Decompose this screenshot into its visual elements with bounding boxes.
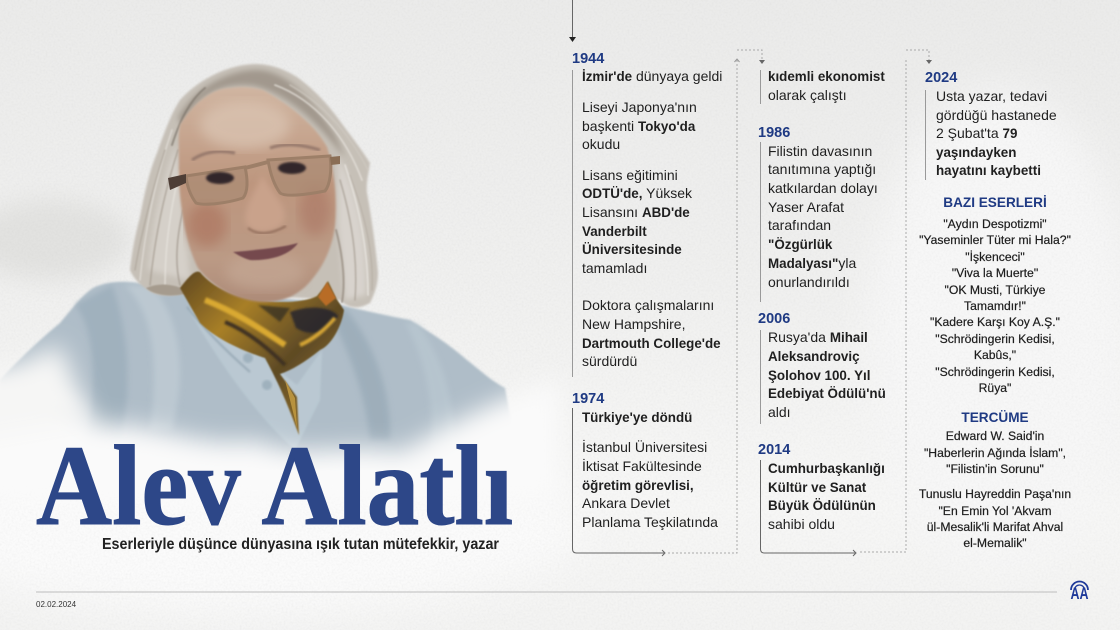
list: translations: "En Emin Yol 'Akvam	[938, 504, 1052, 518]
entry 2024	[936, 88, 1057, 178]
entry 1944: sürdürdü	[582, 353, 637, 369]
entry 1974: İstanbul Üniversitesi	[582, 438, 707, 455]
entry continued: kıdemli ekonomist	[768, 69, 885, 84]
title: Alev Alatlı	[36, 422, 513, 549]
heading: translations: TERCÜME	[961, 410, 1029, 425]
entry 2024: 2 Şubat'ta 79	[936, 125, 1017, 141]
entry 2024: hayatını kaybetti	[936, 163, 1041, 178]
list: works	[919, 217, 1071, 395]
entry 2006: Rusya'da Mihail	[768, 329, 868, 345]
entry 2014: Kültür ve Sanat	[768, 480, 867, 495]
entry 1974	[582, 410, 718, 530]
timeline connector: column 3	[924, 90, 926, 180]
list: translations: Tunuslu Hayreddin Paşa'nın	[919, 487, 1071, 501]
date: 02.02.2024	[36, 600, 77, 609]
list: works: "İşkenceci"	[965, 250, 1025, 264]
year 2024: 2024	[925, 70, 957, 86]
year 1986: 1986	[758, 125, 790, 141]
entry 2006: Aleksandroviç	[768, 349, 860, 364]
list: works: "Kadere Karşı Koy A.Ş."	[930, 315, 1060, 329]
list: works: Rüya"	[979, 381, 1011, 395]
list: translations	[919, 429, 1071, 550]
entry continued	[768, 69, 885, 103]
entry 1944: başkenti Tokyo'da	[582, 118, 696, 134]
entry 1974: Ankara Devlet	[582, 495, 670, 511]
list: works: "Yaseminler Tüter mi Hala?"	[919, 233, 1071, 247]
timeline connector: column 2	[760, 50, 932, 556]
entry 1986: Madalyası"yla	[768, 255, 856, 271]
glasses	[168, 156, 340, 204]
entry 1986	[768, 143, 878, 290]
hair back	[130, 64, 378, 307]
entry 2006: aldı	[768, 404, 791, 420]
heading: works: BAZI ESERLERİ	[943, 195, 1047, 210]
entry 1986: tanıtımına yaptığı	[768, 161, 876, 177]
entry 1974: Türkiye'ye döndü	[582, 410, 692, 425]
timeline column 3	[925, 70, 1057, 178]
timeline connector: column 1	[569, 0, 765, 556]
entry 1986: onurlandırıldı	[768, 274, 850, 290]
icon: AA logo	[1070, 582, 1089, 603]
entry 1944: New Hampshire,	[582, 316, 685, 332]
entry 2006: Edebiyat Ödülü'nü	[768, 386, 886, 401]
mouth	[233, 243, 298, 260]
list: works: "OK Musti, Türkiye	[945, 283, 1046, 297]
nose	[245, 175, 285, 232]
entry 2024: yaşındayken	[936, 145, 1016, 160]
entry 1974: öğretim görevlisi,	[582, 478, 694, 493]
entry 1944: Doktora çalışmalarını	[582, 297, 714, 313]
list: translations: Edward W. Said'in	[946, 429, 1044, 443]
entry 1986: tarafından	[768, 217, 831, 233]
list: translations: "Haberlerin Ağında İslam",	[924, 446, 1066, 460]
shirt fade to paper	[0, 360, 560, 500]
list: works: "Viva la Muerte"	[952, 266, 1038, 280]
entry 1944: ODTÜ'de, Yüksek	[582, 185, 693, 201]
year 1944: 1944	[572, 51, 604, 67]
entry 2014	[768, 461, 885, 532]
footer rule	[36, 592, 1057, 593]
entry 1944: Üniversitesinde	[582, 242, 682, 257]
entry 1944: Liseyi Japonya'nın	[582, 99, 697, 115]
entry 1944: İzmir'de dünyaya geldi	[582, 68, 722, 84]
hair strands	[135, 85, 372, 302]
entry 2006: Şolohov 100. Yıl	[768, 368, 870, 383]
list: translations: "Filistin'in Sorunu"	[946, 462, 1044, 476]
portrait illustration	[0, 64, 560, 500]
timeline column 2	[758, 69, 886, 532]
entry 2006	[768, 329, 886, 420]
eyebrows	[192, 151, 235, 160]
entry 1986: katkılardan dolayı	[768, 180, 878, 196]
icon: AA logo: AA	[1070, 585, 1089, 603]
entry 1986: Filistin davasının	[768, 143, 872, 159]
entry 2024: gördüğü hastanede	[936, 107, 1057, 123]
entry 1944: Lisansını ABD'de	[582, 204, 690, 220]
eyes	[206, 172, 234, 184]
entry 1974: İktisat Fakültesinde	[582, 457, 702, 474]
entry 1944: tamamladı	[582, 260, 647, 276]
entry 1944: Lisans eğitimini	[582, 167, 678, 183]
entry 2014: Büyük Ödülünün	[768, 498, 876, 513]
list: works: "Schrödingerin Kedisi,	[935, 332, 1055, 346]
list: works: Tamamdır!"	[964, 299, 1026, 313]
entry 2014: sahibi oldu	[768, 516, 835, 532]
list: translations: el-Memalik"	[963, 536, 1027, 550]
scarf	[180, 272, 344, 435]
hair shading	[178, 70, 345, 158]
list: works: Kabûs,"	[974, 348, 1016, 362]
entry 2024: Usta yazar, tedavi	[936, 88, 1047, 104]
entry 1986: Yaser Arafat	[768, 199, 844, 215]
entry 1944: Vanderbilt	[582, 224, 647, 239]
timeline column 1	[572, 51, 722, 530]
entry 1974: Planlama Teşkilatında	[582, 514, 718, 530]
year 1974: 1974	[572, 391, 604, 407]
list: translations: ül-Mesalik'li Marifat Ahval	[927, 520, 1063, 534]
entry continued: olarak çalıştı	[768, 87, 847, 103]
entry 1986: "Özgürlük	[768, 237, 833, 252]
face	[179, 87, 336, 302]
entry 1944	[582, 68, 722, 369]
year 2014: 2014	[758, 442, 790, 458]
entry 1944: okudu	[582, 136, 620, 152]
subtitle: Eserleriyle düşünce dünyasına ışık tutan mütefekkir, yazar	[102, 536, 499, 553]
year 2006: 2006	[758, 311, 790, 327]
shirt	[0, 282, 520, 470]
list: works: "Aydın Despotizmi"	[943, 217, 1047, 231]
entry 2014: Cumhurbaşkanlığı	[768, 461, 885, 476]
entry 1944: Dartmouth College'de	[582, 336, 721, 351]
list: works: "Schrödingerin Kedisi,	[935, 365, 1055, 379]
